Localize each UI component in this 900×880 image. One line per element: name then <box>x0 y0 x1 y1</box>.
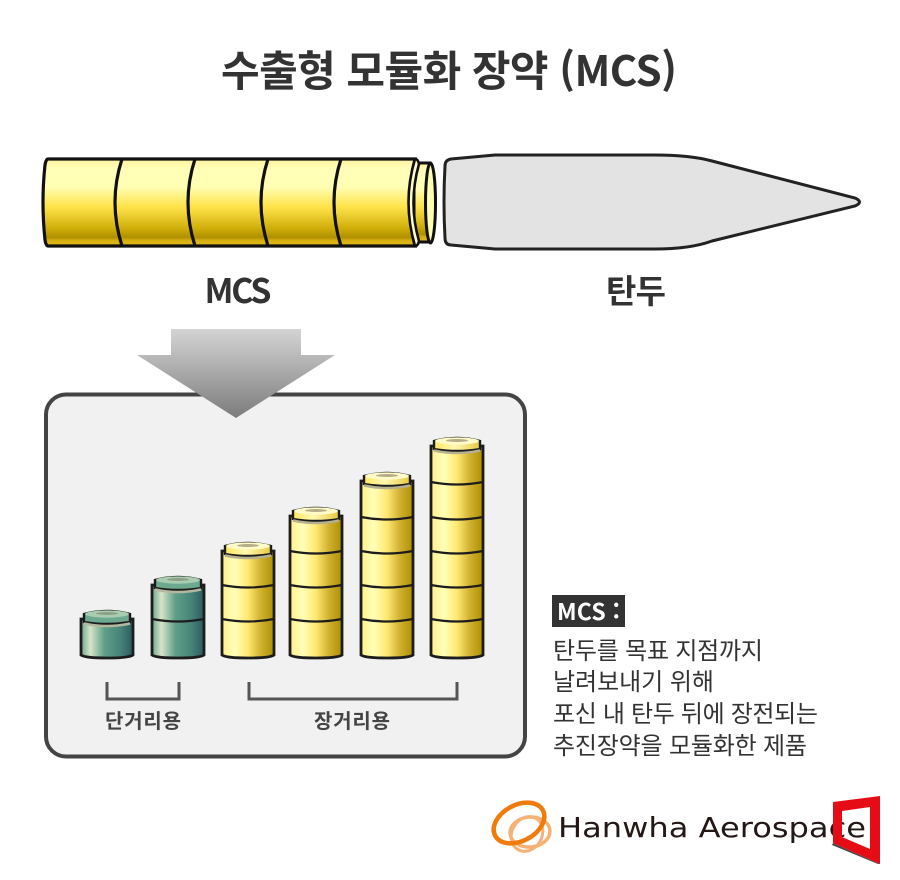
callout: MCS definition <box>552 593 818 761</box>
label: long range: 장거리용 <box>314 705 390 734</box>
title: 수출형 모듈화 장약 (MCS) <box>221 38 677 99</box>
stack: long range 3 modules <box>222 542 274 658</box>
illustration: warhead <box>444 155 860 249</box>
logo swirl <box>487 794 551 857</box>
callout text: 추진장약을 모듈화한 제품 <box>553 726 807 761</box>
bracket: short range <box>107 682 179 699</box>
bracket: long range <box>249 682 457 699</box>
arrow: down <box>137 329 335 418</box>
label: short range: 단거리용 <box>105 705 181 734</box>
stack: long range 6 modules <box>431 437 483 658</box>
callout text: 포신 내 탄두 뒤에 장전되는 <box>553 694 818 729</box>
label: warhead: 탄두 <box>606 265 666 313</box>
logo: Hanwha Aerospace <box>487 794 880 864</box>
logo wordmark: Hanwha Aerospace <box>558 811 866 844</box>
illustration: MCS charge tube <box>43 159 436 246</box>
callout heading: MCS : <box>557 593 620 627</box>
callout text: 탄두를 목표 지점까지 <box>553 631 763 666</box>
stack: long range 4 modules <box>290 507 342 658</box>
callout text: 날려보내기 위해 <box>553 662 714 697</box>
stack: short range 2 modules <box>152 576 204 658</box>
callout text <box>553 631 818 761</box>
stack: short range 1 module <box>81 610 133 658</box>
label: MCS: MCS <box>204 264 272 313</box>
panel: charge configurations <box>46 394 525 756</box>
logo red frame <box>832 796 880 864</box>
stack: long range 5 modules <box>361 472 413 658</box>
